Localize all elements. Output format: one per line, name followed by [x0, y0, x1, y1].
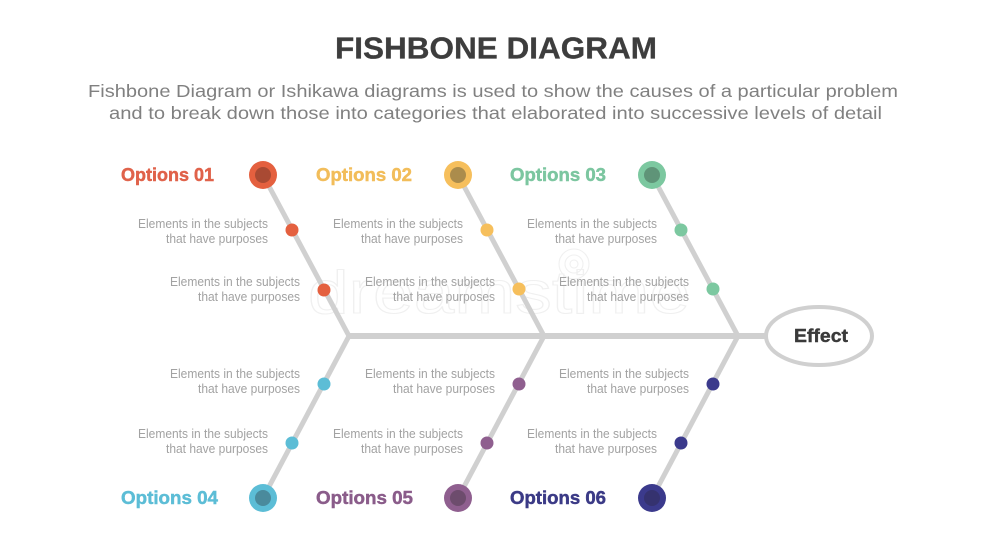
- item text: [170, 367, 300, 396]
- branch: options 03: [510, 161, 738, 336]
- dot: [706, 378, 720, 390]
- effect label: Effect: [794, 325, 848, 346]
- node: [638, 161, 666, 189]
- dot: [286, 436, 298, 450]
- title: FISHBONE DIAGRAM: [335, 30, 657, 66]
- node: [444, 161, 472, 189]
- heading: Options 06: [510, 488, 606, 508]
- item text: that have purposes: [555, 232, 657, 246]
- item text: that have purposes: [587, 290, 689, 304]
- item text: that have purposes: [555, 442, 657, 456]
- heading: Options 04: [121, 488, 218, 508]
- item text: [333, 427, 463, 456]
- item text: that have purposes: [166, 442, 268, 456]
- branch: options 01: [121, 161, 349, 336]
- item text: Elements in the subjects: [527, 217, 657, 231]
- dot: [318, 378, 330, 390]
- node: [444, 484, 472, 512]
- dot: [674, 436, 688, 450]
- dot: [318, 284, 330, 296]
- heading: Options 05: [316, 488, 413, 508]
- spine: [349, 333, 768, 339]
- item text: Elements in the subjects: [333, 427, 463, 441]
- watermark: dreamstime: [308, 259, 690, 326]
- item text: [559, 275, 689, 304]
- item text: that have purposes: [166, 232, 268, 246]
- item text: [365, 367, 495, 396]
- dot: [480, 436, 494, 450]
- heading: Options 01: [121, 165, 214, 185]
- item text: Elements in the subjects: [559, 367, 689, 381]
- item text: that have purposes: [198, 290, 300, 304]
- item text: Elements in the subjects: [559, 275, 689, 289]
- item text: [527, 427, 657, 456]
- item text: [333, 217, 463, 246]
- item text: Elements in the subjects: [365, 275, 495, 289]
- subtitle: Fishbone Diagram or Ishikawa diagrams is used to show the causes of a particular problem: [88, 81, 898, 101]
- dot: [480, 224, 494, 236]
- item text: Elements in the subjects: [170, 275, 300, 289]
- item text: that have purposes: [587, 382, 689, 396]
- dot: [674, 224, 688, 236]
- node: [249, 484, 277, 512]
- item text: Elements in the subjects: [138, 217, 268, 231]
- item text: Elements in the subjects: [170, 367, 300, 381]
- item text: [170, 275, 300, 304]
- item text: Elements in the subjects: [527, 427, 657, 441]
- node: [249, 161, 277, 189]
- item text: Elements in the subjects: [365, 367, 495, 381]
- heading: Options 02: [316, 165, 412, 185]
- dot: [706, 282, 720, 296]
- item text: that have purposes: [393, 290, 495, 304]
- dot: [512, 282, 526, 296]
- item text: [559, 367, 689, 396]
- branch: options 02: [316, 161, 544, 336]
- heading: Options 03: [510, 165, 606, 185]
- item text: [365, 275, 495, 304]
- subtitle: [88, 81, 898, 123]
- node: [638, 484, 666, 512]
- dot: [286, 224, 298, 236]
- item text: Elements in the subjects: [138, 427, 268, 441]
- item text: [138, 217, 268, 246]
- effect ellipse: [766, 307, 872, 365]
- branch: options 06: [510, 336, 738, 512]
- dot: [512, 378, 526, 390]
- item text: that have purposes: [361, 442, 463, 456]
- subtitle: and to break down those into categories that elaborated into successive levels of detail: [109, 103, 882, 123]
- branch: options 04: [121, 336, 349, 512]
- item text: that have purposes: [198, 382, 300, 396]
- item text: that have purposes: [393, 382, 495, 396]
- item text: Elements in the subjects: [333, 217, 463, 231]
- item text: [527, 217, 657, 246]
- item text: [138, 427, 268, 456]
- branch: options 05: [316, 336, 544, 512]
- item text: that have purposes: [361, 232, 463, 246]
